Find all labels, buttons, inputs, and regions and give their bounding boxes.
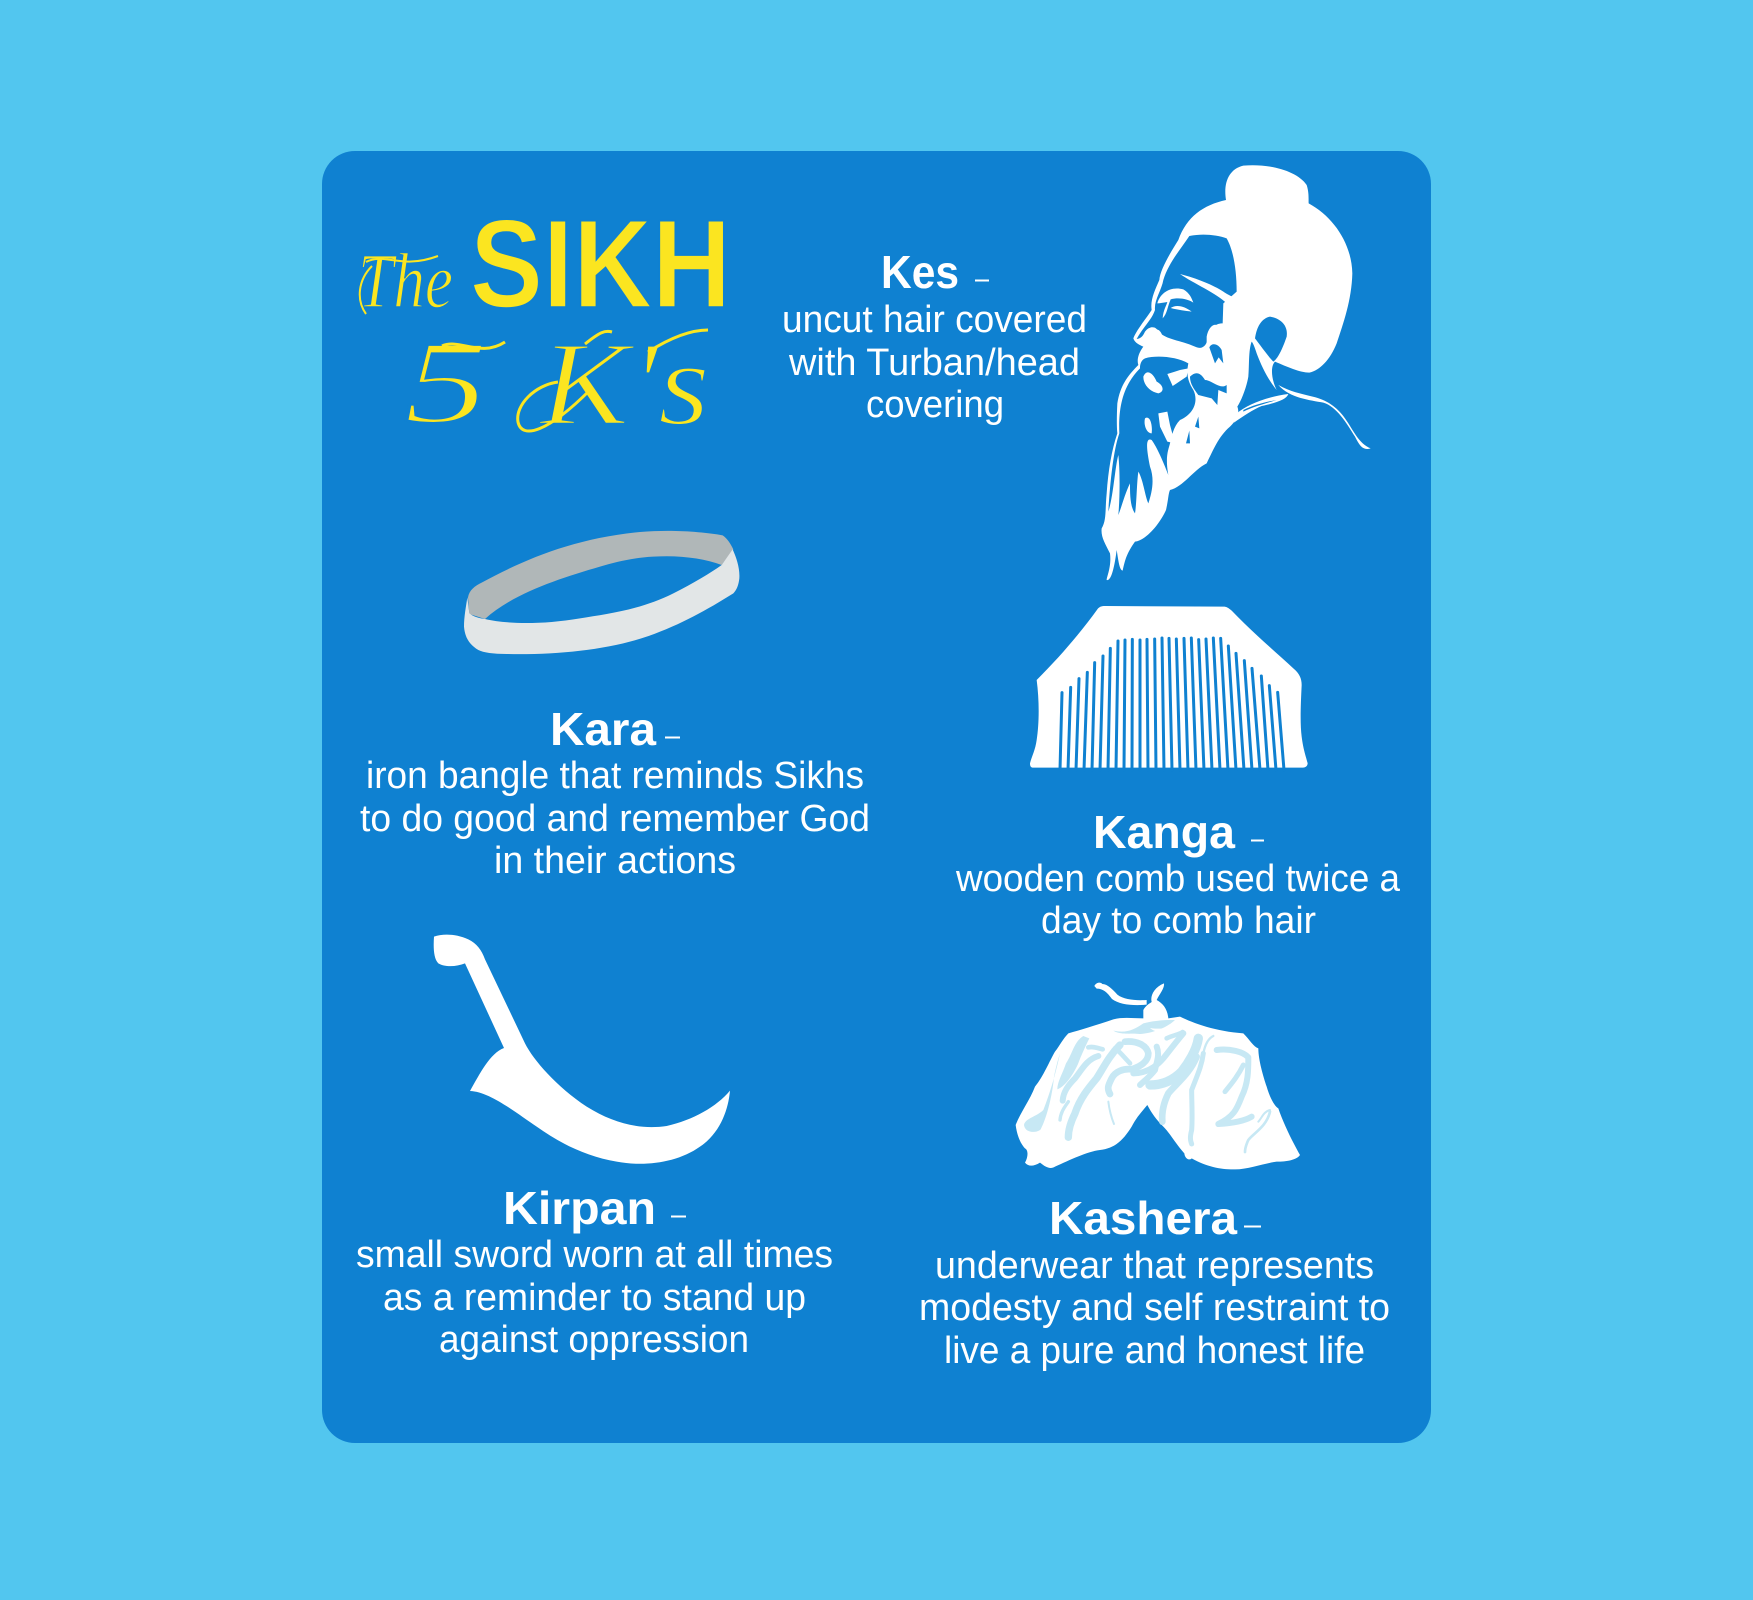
icon: Kanga comb <box>1030 606 1308 770</box>
text block: Kirpan: against oppression <box>439 1319 749 1361</box>
text block: Kashera: modesty and self restraint to <box>919 1287 1390 1329</box>
title: The Sikh 5 K's <box>358 195 731 450</box>
text block: Kanga: wooden comb used twice a <box>955 858 1401 900</box>
text block: Kara: Kara <box>550 703 656 755</box>
icon: Kara bangle <box>464 531 739 654</box>
text block: Kanga: day to comb hair <box>1041 900 1316 942</box>
text block: Kara: in their actions <box>494 840 736 882</box>
text block: Kanga: Kanga <box>1093 806 1235 858</box>
title: The Sikh 5 K's: K's <box>538 317 710 450</box>
text block: Kara: iron bangle that reminds Sikhs <box>366 755 864 797</box>
text block: Kirpan: – <box>671 1198 686 1231</box>
text block: Kirpan: as a reminder to stand up <box>383 1277 806 1319</box>
text block: Kes: – <box>975 262 989 295</box>
text block: Kashera: Kashera <box>1049 1192 1237 1244</box>
text block: Kirpan: Kirpan <box>503 1182 656 1234</box>
text block: Kanga: – <box>1251 822 1264 855</box>
text block: Kes: Kes <box>881 246 959 298</box>
title: The Sikh 5 K's: 5 <box>404 317 488 448</box>
icon: Kirpan sword <box>434 935 730 1164</box>
text block: Kashera: – <box>1244 1208 1261 1241</box>
text block: Kanga <box>955 806 1401 942</box>
icon: Kashera undergarment <box>1016 983 1300 1169</box>
text block: Kara <box>360 703 870 882</box>
text block: Kara: – <box>665 719 680 752</box>
title: The Sikh 5 K's: The <box>358 237 453 324</box>
text block: Kashera: underwear that represents <box>935 1245 1374 1287</box>
text block: Kashera: live a pure and honest life <box>944 1330 1365 1372</box>
text block: Kes: with Turban/head <box>788 342 1080 384</box>
text block: Kashera <box>919 1192 1390 1372</box>
text block: Kirpan: small sword worn at all times <box>356 1234 833 1276</box>
panel: main blue card <box>322 151 1431 1443</box>
text block: Kes: covering <box>866 384 1004 426</box>
text block: Kes <box>782 246 1087 426</box>
title: The Sikh 5 K's: SIKH <box>470 195 731 334</box>
icon: Kes bearded man with turban <box>1102 165 1371 580</box>
text block: Kara: to do good and remember God <box>360 798 870 840</box>
text block: Kes: uncut hair covered <box>782 299 1087 341</box>
text block: Kirpan <box>356 1182 833 1361</box>
